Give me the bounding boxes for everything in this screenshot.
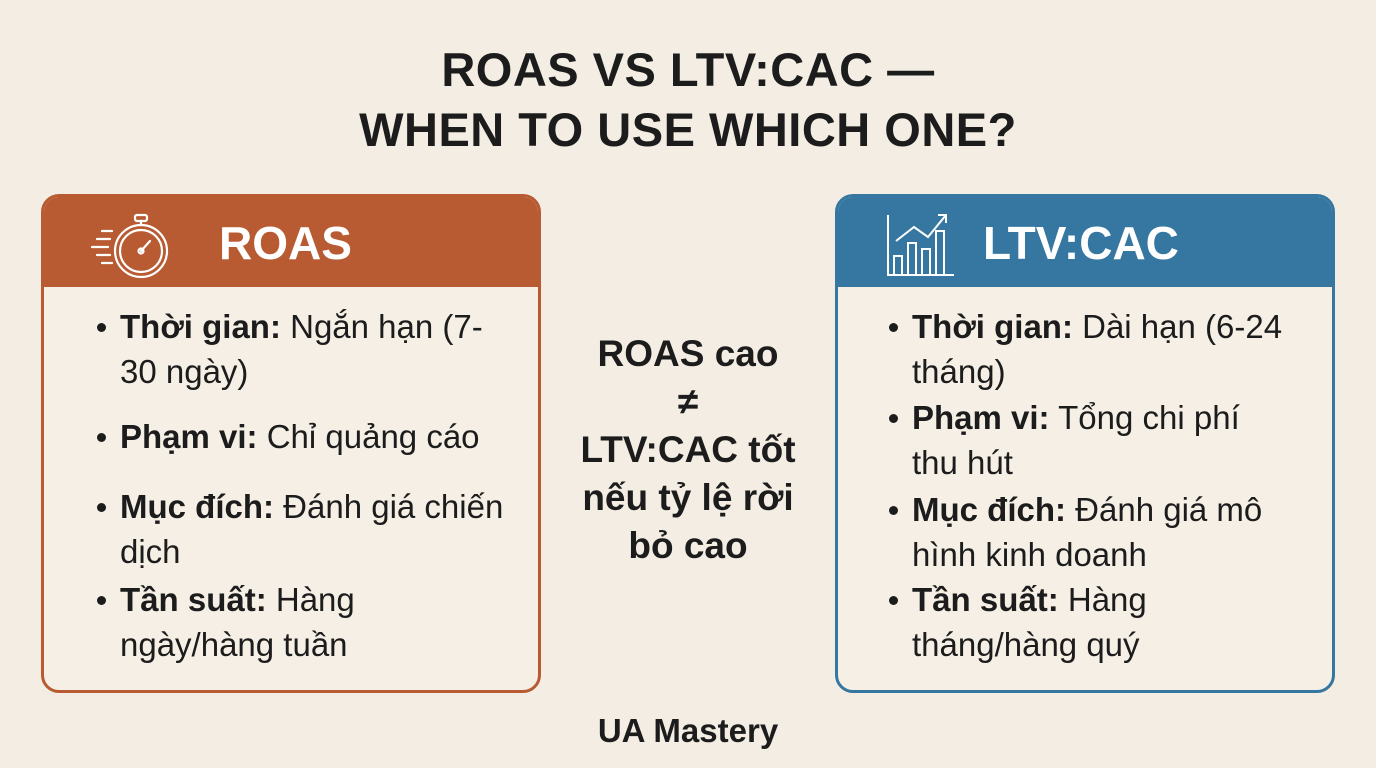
panel: ROAS: [41, 194, 541, 693]
footer: UA Mastery: [598, 712, 778, 749]
text: 30 ngày): [120, 353, 248, 390]
text: tháng/hàng quý: [912, 626, 1140, 663]
text: Thời gian: Dài hạn (6-24: [912, 308, 1282, 345]
title: ROAS VS LTV:CAC —: [441, 43, 935, 96]
text: hình kinh doanh: [912, 536, 1147, 573]
icon: stopwatch: [90, 214, 168, 278]
center callout: [580, 333, 796, 566]
text: Phạm vi: Chỉ quảng cáo: [120, 418, 480, 455]
text: Mục đích: Đánh giá mô: [912, 491, 1262, 528]
text: Phạm vi: Tổng chi phí: [912, 399, 1240, 436]
text: Tần suất: Hàng: [912, 581, 1147, 618]
LTV:CAC list text: [889, 308, 1282, 663]
header: LTV:CAC: LTV:CAC: [983, 217, 1179, 269]
center callout: bỏ cao: [628, 525, 748, 566]
center callout: ≠: [678, 381, 698, 422]
header: LTV:CAC: [838, 197, 1332, 287]
text: Tần suất: Hàng: [120, 581, 355, 618]
icon: bar chart trend: [887, 214, 954, 276]
center callout: ROAS cao: [598, 333, 778, 374]
ROAS list text: [97, 308, 503, 663]
center callout: LTV:CAC tốt: [580, 429, 796, 470]
panel: LTV:CAC: [835, 194, 1335, 693]
text: Thời gian: Ngắn hạn (7-: [120, 308, 483, 345]
text: dịch: [120, 533, 181, 570]
text: Mục đích: Đánh giá chiến: [120, 488, 503, 525]
text: ngày/hàng tuần: [120, 626, 348, 663]
header: ROAS: ROAS: [219, 217, 352, 269]
header: ROAS: [44, 197, 538, 287]
center callout: nếu tỷ lệ rời: [582, 477, 794, 518]
title: [359, 43, 1017, 156]
text: thu hút: [912, 444, 1013, 481]
text: tháng): [912, 353, 1006, 390]
title: WHEN TO USE WHICH ONE?: [359, 103, 1017, 156]
